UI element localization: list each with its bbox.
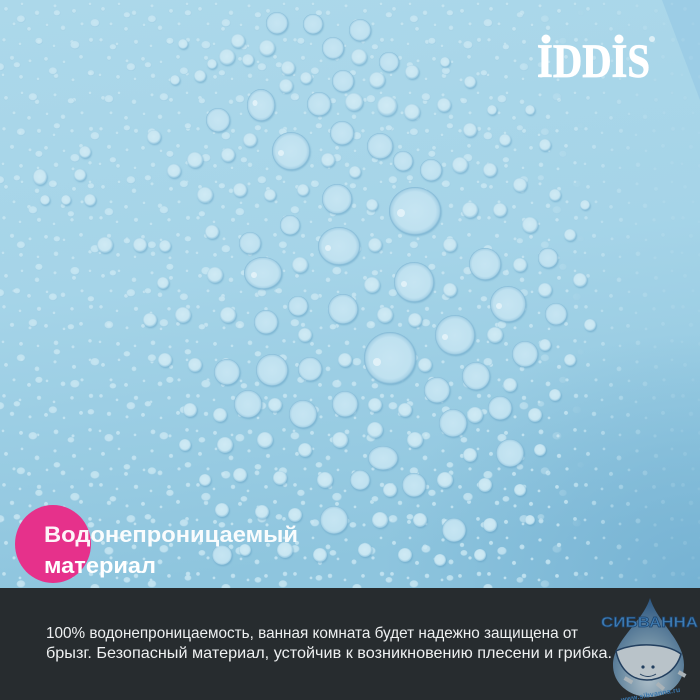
watermark: Сибванна [601, 598, 698, 700]
description text: 100% водонепроницаемость, ванная комната будет надежно защищена от [46, 625, 579, 642]
logo: IDDIS: IDDIS [537, 35, 650, 88]
medium droplets [33, 34, 596, 566]
heading: Водонепроницаемый [44, 522, 298, 547]
dark description panel [0, 588, 700, 700]
watermark bath [616, 645, 686, 691]
description text [46, 625, 612, 662]
watermark: Сибванна: СИБВАННА [601, 614, 698, 631]
large droplets [206, 12, 567, 565]
heading [44, 522, 298, 578]
droplet highlights [251, 100, 502, 366]
small droplets [0, 10, 576, 588]
description text: брызг. Безопасный материал, устойчив к возникновению плесени и грибка. [46, 645, 612, 662]
heading: материал [44, 553, 156, 578]
pink accent blob [15, 505, 91, 583]
